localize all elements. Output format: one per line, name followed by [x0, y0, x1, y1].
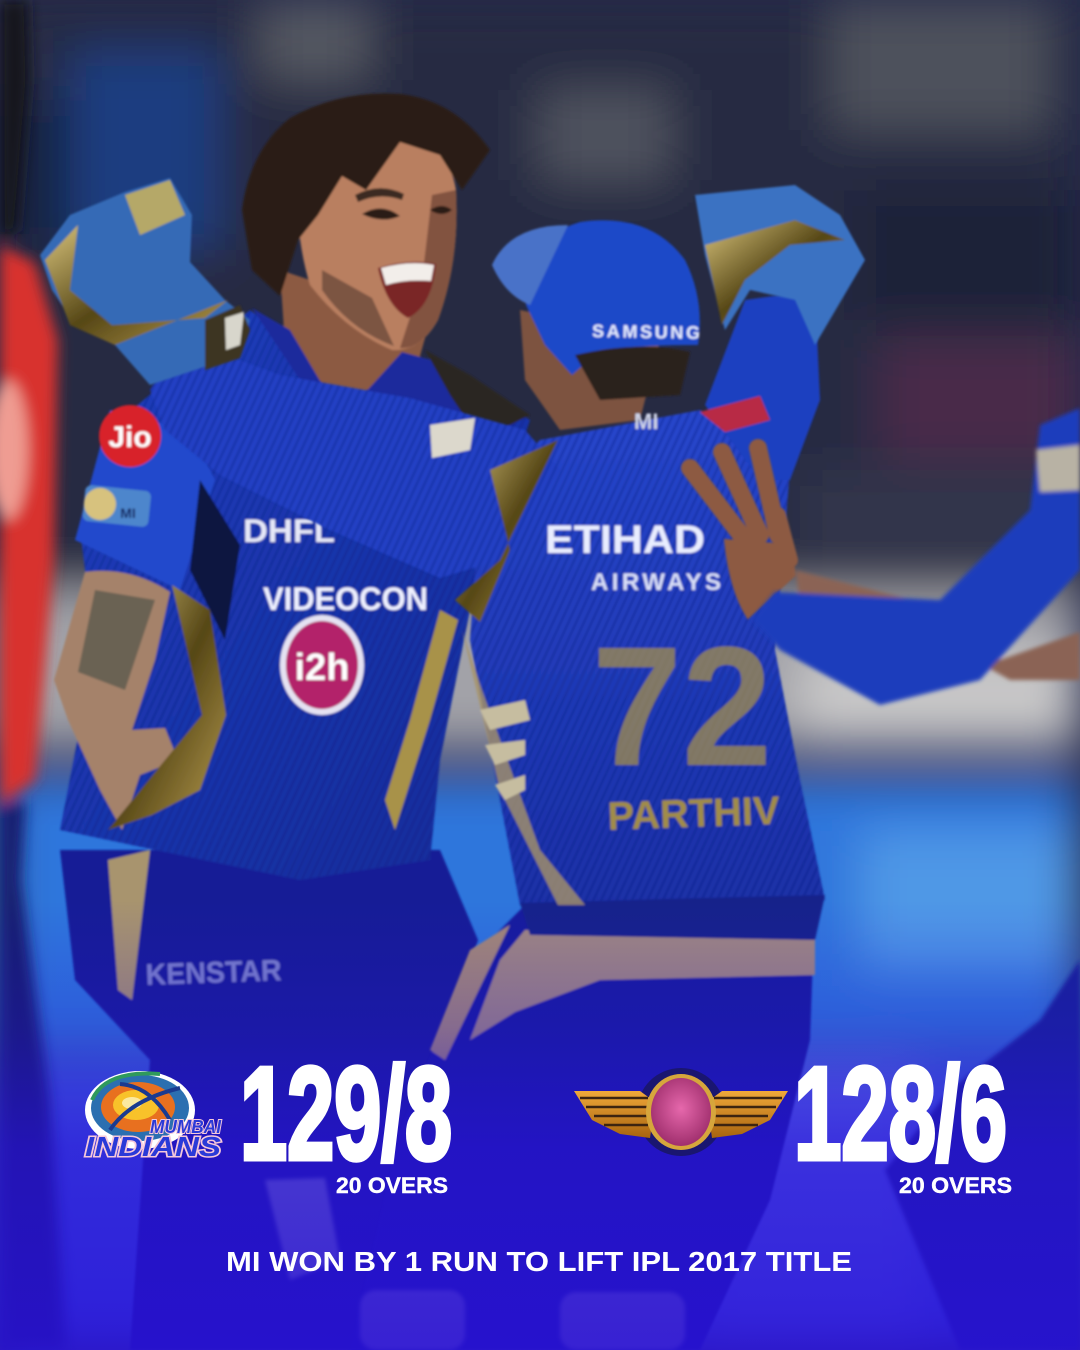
player: bowler, celebrating: [54, 94, 530, 1350]
collar number: MI: [634, 409, 658, 434]
sponsor: i2h badge: i2h: [295, 647, 349, 689]
sponsor: Jio: [99, 405, 161, 467]
logo: Mumbai Indians: [85, 1071, 222, 1162]
bowler shirt stripes: [60, 310, 530, 880]
keeper hand on shoulder of third player: [690, 448, 795, 618]
sponsor: Etihad Airways: ETIHAD: [545, 518, 705, 562]
neck: [280, 270, 430, 410]
arm stripes: [150, 338, 560, 578]
gold collar trim: [425, 350, 530, 440]
player: wicketkeeper Parthiv, from behind: [150, 220, 825, 1350]
face: [296, 130, 457, 350]
right keeping glove: [695, 185, 865, 345]
keeper torso: [470, 410, 825, 915]
jersey name: PARTHIV: [607, 789, 781, 839]
teammate blue sleeve: [752, 408, 1080, 705]
score: 129/8: 129/8: [240, 1040, 452, 1187]
sleeve badge: MI: [120, 505, 136, 521]
sleeve badge: [82, 485, 151, 527]
sponsor: i2h badge: [280, 615, 364, 715]
sponsor: Videocon: VIDEOCON: [263, 581, 428, 617]
cap: SAMSUNG: [592, 321, 700, 343]
sponsor: Etihad Airways: [545, 518, 721, 596]
logo: Rising Pune Supergiant: [574, 1068, 788, 1156]
cap: [492, 220, 700, 400]
eyes and brows: [362, 208, 400, 220]
scoreboard: Mumbai Indians: [85, 1040, 452, 1198]
gold trim on keeper shirt: [455, 440, 558, 622]
keeper waistband: [520, 895, 825, 940]
result caption: MI WON BY 1 RUN TO LIFT IPL 2017 TITLE: [226, 1246, 852, 1277]
bowler trousers: [60, 850, 478, 1350]
keeper trousers: [350, 900, 815, 1350]
left keeping glove: [40, 178, 250, 385]
logo: Mumbai Indians: INDIANS: [85, 1131, 221, 1162]
scoreboard: Rising Pune Supergiant: [574, 1040, 1012, 1198]
player: teammate at right edge: [752, 408, 1080, 1350]
collar: [252, 308, 520, 470]
smile: [378, 262, 436, 318]
blurred foreground player at left edge: [0, 0, 66, 1350]
keeper arm across bowler: [150, 338, 560, 578]
logo: Mumbai Indians: MUMBAI: [150, 1117, 222, 1137]
gold jersey trim: [108, 585, 226, 830]
jersey number 72: 72: [592, 612, 772, 802]
sponsor: Jio: Jio: [108, 421, 152, 454]
shoulder red tag: [700, 396, 770, 432]
sponsor: Etihad Airways: AIRWAYS: [591, 569, 721, 596]
tattooed arm: [54, 571, 178, 830]
teammate lower body: [885, 960, 1080, 1350]
keeper shirt stripes: [470, 410, 825, 915]
hair: [242, 94, 490, 296]
bowler torso: [60, 310, 530, 880]
purple-blue bottom gradient overlay: [0, 900, 1080, 1350]
shoes at bottom: [265, 1178, 685, 1350]
bowler sleeve: [75, 410, 215, 590]
keeper neck and head: [520, 310, 660, 430]
sponsor: DHFL: DHFL: [243, 513, 335, 549]
forearm skin: [795, 570, 1080, 680]
overs: MI: 20 OVERS: [336, 1173, 448, 1198]
keeper raised arm: [705, 290, 820, 480]
sponsor: Kenstar: KENSTAR: [145, 954, 282, 992]
overs: RPS: 20 OVERS: [899, 1173, 1012, 1198]
